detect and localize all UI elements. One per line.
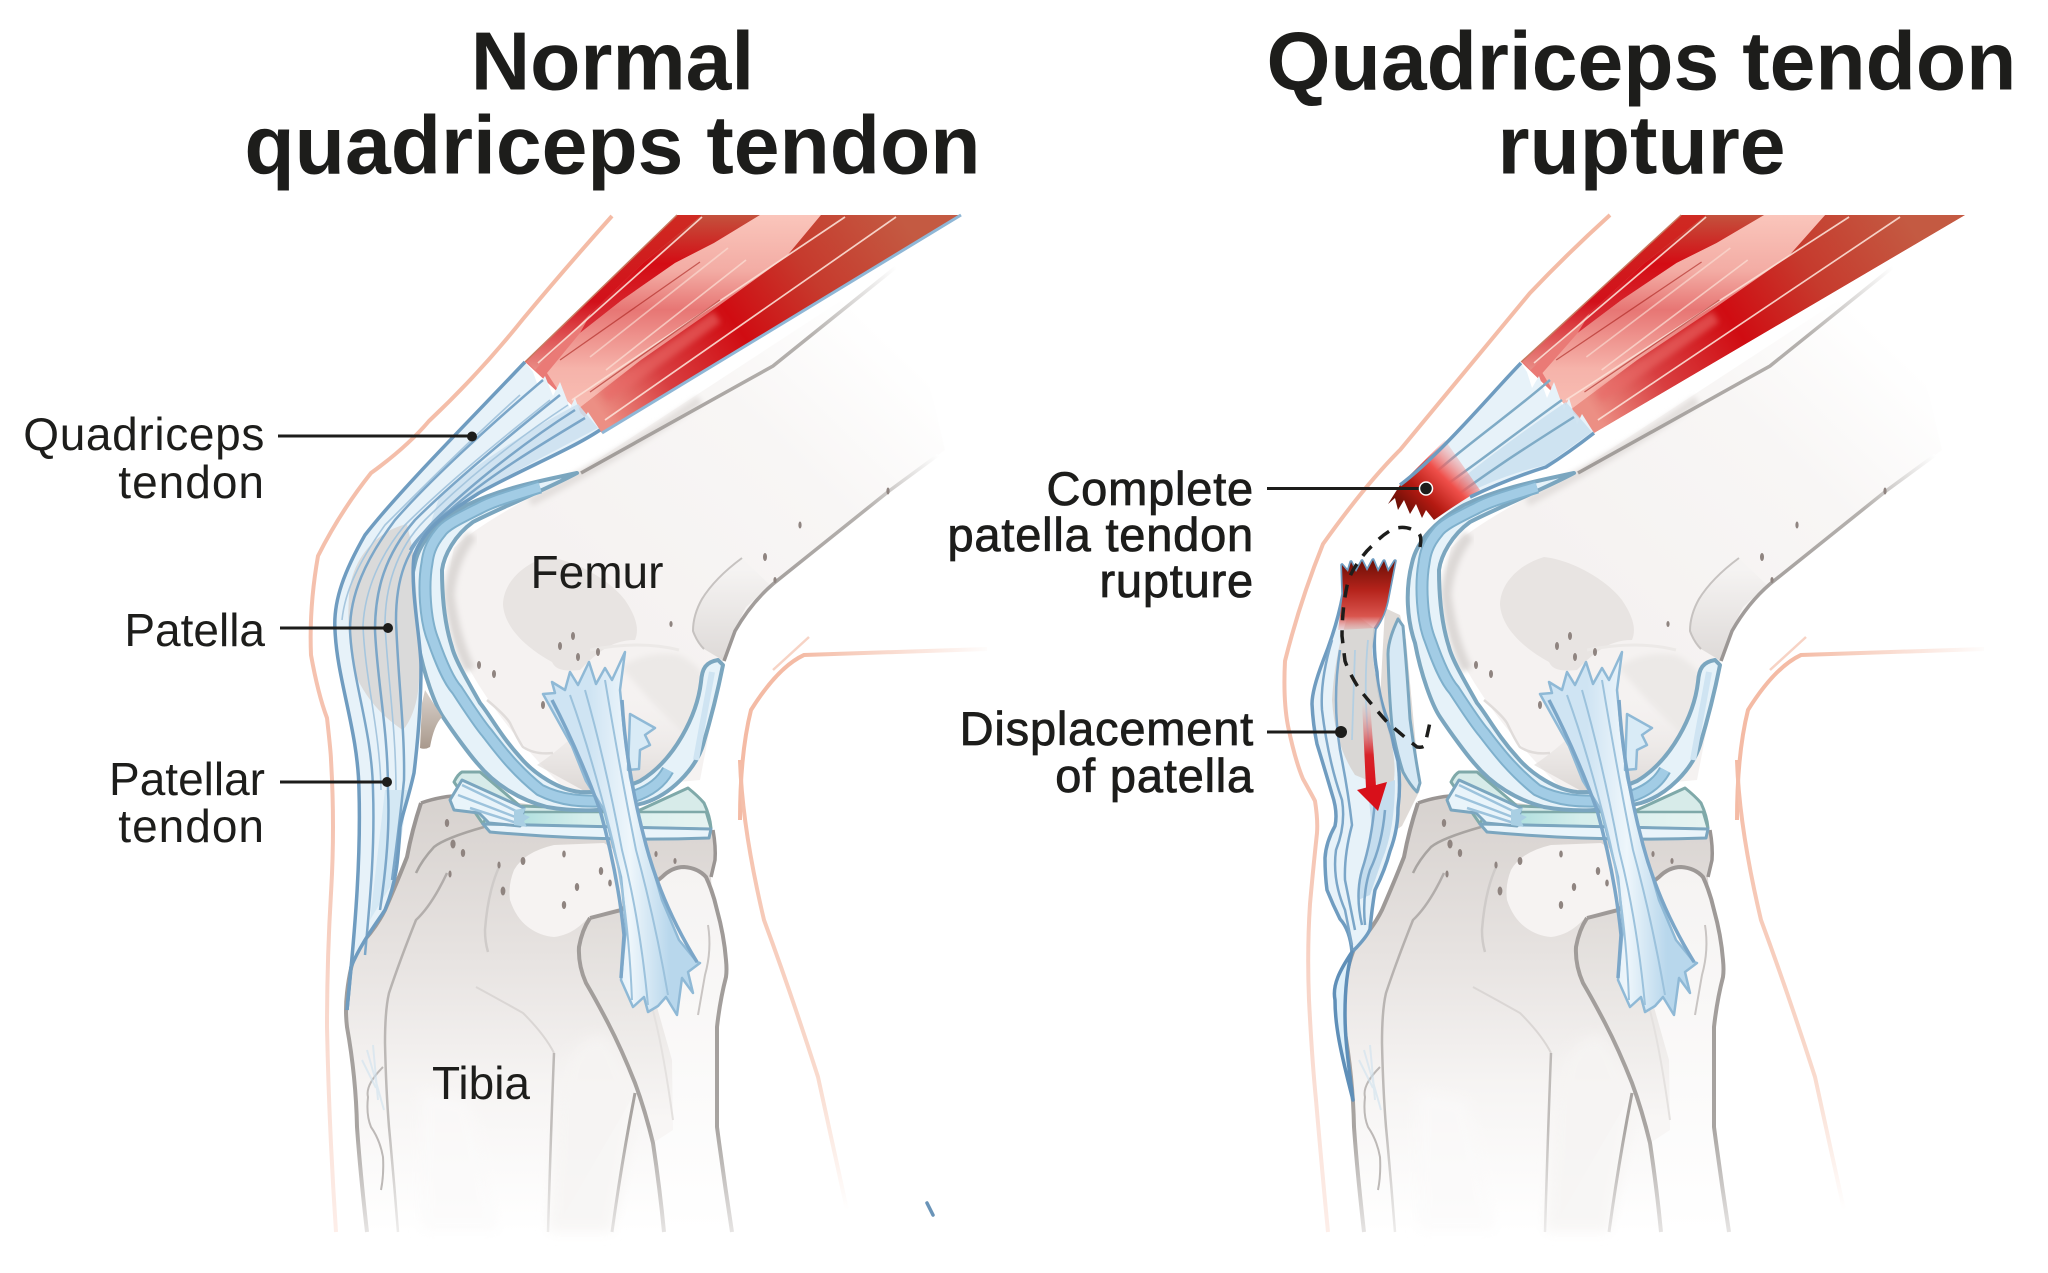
lower tendon remnant along tibia bbox=[1334, 952, 1353, 1100]
label: quadriceps tendon: Quadriceps bbox=[23, 408, 265, 460]
tendon outlines bbox=[335, 362, 600, 1010]
patella tail bbox=[420, 690, 442, 749]
panel: ruptured knee bbox=[1284, 215, 1984, 1232]
patella bone bbox=[348, 524, 420, 730]
femur, tibia, fibula and cartilage bbox=[346, 262, 945, 1232]
quadriceps muscle bbox=[525, 215, 961, 433]
label: displacement of patella: of patella bbox=[1055, 749, 1254, 802]
panel: normal knee bbox=[311, 215, 987, 1232]
patella cartilage sliver and tail bbox=[1380, 608, 1420, 830]
displaced patella and wavy patellar tendon bbox=[1312, 560, 1400, 952]
stub outlines bbox=[1400, 363, 1594, 497]
heading: normal quadriceps tendon: quadriceps tendon bbox=[244, 100, 981, 192]
heading: quadriceps tendon rupture: Quadriceps tendon bbox=[1267, 16, 2016, 108]
label: complete patella tendon rupture: Complete bbox=[1046, 462, 1254, 515]
small blue mark bbox=[927, 1203, 933, 1215]
skin outline back bbox=[1737, 637, 1984, 1210]
label: tibia: Tibia bbox=[432, 1057, 530, 1109]
label: patellar tendon: Patellar bbox=[109, 753, 265, 805]
label: displacement of patella bbox=[960, 702, 1347, 802]
quadriceps and patellar tendon bbox=[335, 362, 600, 1010]
femur, tibia, fibula and cartilage bbox=[1343, 262, 1942, 1232]
label: patellar tendon: tendon bbox=[118, 800, 265, 852]
label: quadriceps tendon bbox=[23, 408, 477, 508]
label: patellar tendon bbox=[109, 753, 392, 852]
label: patella: Patella bbox=[124, 604, 265, 656]
upper torn tendon stub bbox=[1388, 363, 1594, 520]
label: femur: Femur bbox=[531, 546, 663, 598]
label: complete patella tendon rupture: rupture bbox=[1099, 554, 1254, 607]
rupture bleed upper bbox=[1388, 440, 1480, 520]
quadriceps muscle bbox=[1517, 215, 1965, 433]
rupture bleed lower bbox=[1338, 560, 1395, 630]
label: quadriceps tendon: tendon bbox=[118, 456, 265, 508]
tendon fibres bbox=[350, 380, 585, 955]
label: patella bbox=[124, 604, 393, 656]
dashed original tendon path bbox=[1342, 527, 1430, 747]
skin outline front bbox=[311, 216, 612, 1232]
heading: quadriceps tendon rupture: rupture bbox=[1497, 100, 1786, 192]
heading: normal quadriceps tendon: Normal bbox=[471, 16, 754, 108]
arrow: patella displacement bbox=[1357, 702, 1387, 811]
label: complete patella tendon rupture: patella tendon bbox=[947, 508, 1254, 561]
label: complete patella tendon rupture bbox=[947, 462, 1432, 607]
label: displacement of patella: Displacement bbox=[960, 702, 1254, 755]
skin outline back bbox=[740, 637, 987, 1210]
skin outline front bbox=[1284, 215, 1610, 1232]
